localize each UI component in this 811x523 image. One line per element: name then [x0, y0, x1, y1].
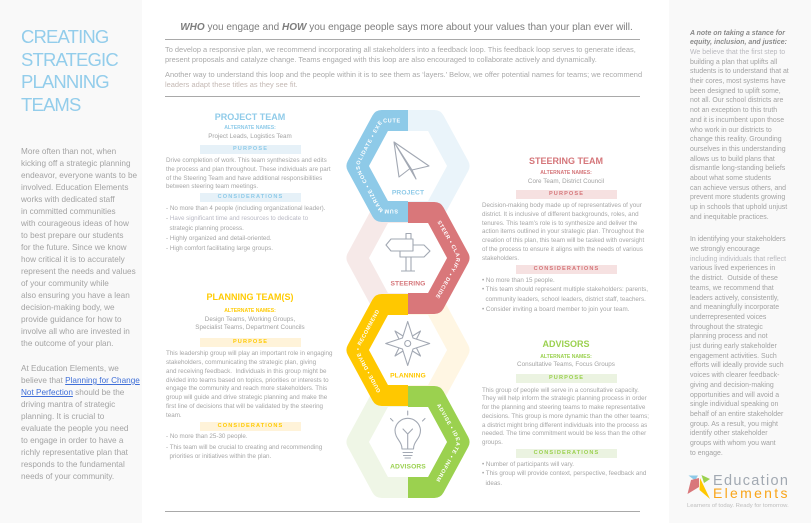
list: considerations [482, 460, 646, 486]
text block: left intro: how critical it is to accurately [21, 255, 125, 264]
text block: intro paragraph two [165, 70, 642, 89]
list: considerations: - No more than 25-30 people. [166, 433, 248, 440]
segment labels on path: ADVISE • IDEATE • INFORM [436, 404, 460, 482]
alternate names label: ALTERNATE NAMES: [224, 124, 276, 130]
text block: stakeholders note: voices with clearer feedback- [690, 372, 779, 379]
list: considerations: - No more than 4 people (including organizational leader). [166, 205, 325, 212]
text: purpose: This leadership group will play an important role in engaging [166, 350, 332, 357]
list: considerations: • No more than 15 people. [482, 276, 555, 284]
heading: steering team: STEERING TEAM [529, 156, 603, 166]
text block: left belief statement: At Education Elements, we [21, 364, 119, 373]
text block: stakeholders note: throughout the strategic [690, 324, 763, 331]
band: considerations: CONSIDERATIONS [534, 450, 599, 456]
panel: advisors [482, 339, 649, 486]
text block: equity note: can achieve versus others, and [690, 185, 786, 192]
text: purpose: for the planning and steering teams to make representative [482, 404, 645, 411]
text block: left belief statement: believe that Planning for Change [21, 376, 140, 385]
text block: stakeholders note: various lived experiences in [690, 265, 775, 272]
title: PLANNING [21, 71, 109, 92]
text block: equity note: dismantle long-standing beliefs [690, 165, 785, 172]
text block: left intro: the outcome of your plan. [21, 339, 113, 348]
list: considerations: - High comfort facilitating large groups. [166, 245, 273, 252]
text block: equity note: We believe that the first step to [690, 49, 785, 56]
text block: left intro: with courageous ideas of how [21, 219, 129, 228]
alternate names label: ALTERNATE NAMES: [224, 308, 276, 314]
text block: left belief statement: driving mantra of strategic [21, 400, 115, 409]
segment: advisors [408, 386, 470, 498]
band: purpose [200, 338, 301, 347]
text block: left belief statement: planning. It is crucial to [21, 412, 104, 421]
alternate names: Core Team, District Council [528, 178, 604, 185]
text block: equity note: not an exception to this truth [690, 107, 777, 114]
text block: intro paragraph one [165, 45, 636, 64]
text block: intro paragraph one: To develop a responsive plan, we recommend incorporating all stakeholders into a feedback loop. This feedback loop serves to generate ideas, [165, 45, 636, 54]
title: CREATING [21, 26, 108, 47]
labels: hexagon centres: PLANNING [390, 372, 426, 380]
text block: stakeholders note: including individuals that reflect [690, 256, 786, 263]
text: purpose [166, 157, 331, 190]
chart: hexagon feedback loop [346, 110, 470, 498]
text block: left intro: to best prepare our students [21, 231, 123, 240]
text block: equity note [690, 30, 789, 221]
text: purpose: tenures. This team’s role is to synthesize and deliver the [482, 220, 637, 226]
list: considerations: ideas. [485, 480, 502, 486]
text: purpose [482, 387, 649, 446]
title [21, 26, 118, 115]
text: purpose [166, 350, 332, 419]
text block: left intro: kicking off a strategic planning [21, 159, 131, 168]
band: considerations [200, 422, 301, 431]
text block: equity note: ourselves in this understanding [690, 146, 786, 153]
text block: stakeholders note: behalf of an entire stakeholder [690, 411, 783, 418]
text block: stakeholders note: identify other stakeholder [690, 430, 768, 437]
text block: stakeholders note: we strongly encourage [690, 246, 760, 253]
text block: left intro: involve all who are invested in [21, 327, 130, 336]
wordmark: Education: Education [713, 473, 789, 489]
list: considerations continued: priorities or initiatives within the plan. [169, 453, 271, 460]
band: purpose: PURPOSE [549, 191, 584, 197]
text block: left intro: More often than not, when [21, 147, 116, 156]
text: purpose: needed. The time commitment would be less than the other [482, 430, 646, 437]
text block: equity note: and inequitable practices. [690, 214, 769, 221]
band: considerations: CONSIDERATIONS [534, 266, 599, 272]
text block: stakeholders note: leaders actively, consistently, [690, 295, 779, 302]
logo: Education Elements [687, 473, 790, 509]
text block: equity note: up in schools that uphold unjust [690, 204, 787, 211]
segment: steering [408, 202, 470, 314]
text block: stakeholders note: engagement activities. Such [690, 353, 777, 360]
panel: planning teams [166, 292, 332, 460]
icon: light bulb [390, 411, 425, 458]
list: considerations continued: - This team will be crucial to creating and recommending [166, 444, 322, 451]
text: purpose: divided into teams based on topics, priorities or interests to [166, 377, 329, 384]
text block: left intro: endeavor, everyone wants to be [21, 171, 137, 180]
text block: left intro: of your community while [21, 279, 109, 288]
band: purpose: PURPOSE [233, 339, 268, 345]
band: considerations [200, 193, 301, 202]
band: considerations: CONSIDERATIONS [218, 194, 283, 200]
text block: left intro: involved. Education Elements [21, 183, 128, 192]
tagline: Learners of today. Ready for tomorrow. [687, 503, 789, 509]
text block: equity note: who work in our districts to [690, 127, 772, 134]
band: purpose [516, 190, 617, 199]
text block: stakeholders note: planning process and not [690, 333, 768, 340]
icon: paper plane [394, 142, 429, 179]
text: purpose: stakeholders. [482, 254, 519, 262]
alternate names: Specialist Teams, Department Councils [195, 324, 305, 331]
text block: stakeholders note: group. As a result, you might [690, 421, 778, 428]
icon: logo mark [688, 475, 710, 499]
alternate names: Project Leads, Logistics Team [208, 132, 292, 140]
text block: left belief statement: responds to the fundamental [21, 460, 125, 469]
band: considerations: CONSIDERATIONS [218, 423, 283, 429]
text block: left belief statement: Not Perfection should be the [21, 388, 124, 397]
segment labels on path: SUMMARIZE • CONSOLIDATE • EXECUTE [356, 118, 400, 214]
text: purpose: team. [166, 412, 182, 419]
text block: equity note: prevent more students growing [690, 194, 785, 201]
band: considerations [516, 265, 617, 274]
heading: planning teams: PLANNING TEAM(S) [206, 292, 294, 302]
band: purpose [200, 145, 301, 154]
text block: stakeholders note: underrepresented voices [690, 314, 766, 321]
band: purpose [516, 374, 617, 383]
panel: left sidebar background [0, 0, 142, 523]
labels: hexagon centres [390, 190, 426, 470]
title: STRATEGIC [21, 49, 118, 70]
text block: left intro: in committed communities [21, 207, 116, 216]
panel: steering team [482, 156, 648, 313]
segment labels on path: GUIDE • DRIVE • RECOMMEND [356, 310, 380, 392]
text block: left belief statement [21, 364, 140, 481]
text block: stakeholders note: efforts will ideally provide such [690, 362, 784, 369]
text: purpose: a district might bring different individuals into the process as [482, 422, 647, 429]
text block: stakeholders note: the district. Outside of these [690, 275, 778, 282]
list: considerations [166, 205, 325, 252]
text block: left intro: decision-making body, we [21, 303, 115, 312]
text block: intro paragraph two: Another way to understand this loop and the people within it is to see them as ‘layers.’ Below, we offer potential names for teams; we recommend [165, 70, 642, 79]
text: purpose: stakeholders, communicating the strategic plan, giving [166, 359, 316, 366]
text: purpose: of the process to ensure it aligns with the needs of various [482, 246, 643, 253]
list: considerations: • This team should represent multiple stakeholders: parents, [482, 286, 648, 293]
text block: stakeholders note: just during early stakeholder [690, 343, 777, 350]
text block: left intro: for the future. Since we know [21, 243, 127, 252]
alternate names: Design Teams, Working Groups, [205, 316, 295, 322]
list: considerations: - Highly organized and detail-oriented. [166, 235, 272, 242]
text block: stakeholders note: and meaningfully incorporate [690, 304, 779, 311]
text: purpose: action items outlined in your strategic plan. Throughout the [482, 228, 644, 235]
text: purpose: Drive completion of work. This team synthesizes and edits [166, 157, 327, 164]
text block: stakeholders note: single individual speaking on [690, 401, 778, 408]
list: considerations: strategic planning process. [169, 225, 244, 232]
text block: equity note: equity, inclusion, and justice: [690, 39, 787, 46]
text block: equity note: students is to understand that at [690, 68, 789, 75]
text block: left belief statement: evaluate the people you need [21, 424, 128, 433]
text: purpose: They will help inform the strategic planning process in order [482, 395, 647, 402]
text: purpose: Decision-making body made up of representatives of your [482, 202, 642, 209]
text block: left belief statement: richly representative plan that [21, 448, 128, 457]
segment: project [346, 110, 408, 222]
text block: stakeholders note: giving and decision-making [690, 382, 774, 389]
text block: stakeholders note: groups with whom you want [690, 440, 776, 447]
segment labels on path [356, 118, 460, 482]
list: considerations: • This group will provide context, perspective, feedback and [482, 470, 646, 477]
text block: equity note: building a plan that uplifts all [690, 59, 777, 66]
text block: left intro: also ensuring you have a lean [21, 291, 130, 300]
text block: equity note: about what some students [690, 175, 771, 182]
text: purpose: first line of decisions that will be validated by the steering [166, 403, 323, 410]
wordmark: Elements: Elements [713, 485, 790, 501]
text block: equity note: allows us to build plans that [690, 156, 775, 163]
heading: advisors: ADVISORS [542, 339, 590, 349]
text: purpose: creation of this plan, this team will be tasked with oversight [482, 237, 644, 244]
text block: left intro: works with dedicated staff [21, 195, 115, 204]
alternate names: Consultative Teams, Focus Groups [517, 361, 615, 368]
text block: equity note: not all. Our school districts are [690, 97, 783, 104]
alternate names [195, 316, 305, 331]
text: purpose: the process and plan throughout. These individuals are part [166, 166, 331, 173]
panel: right sidebar background [669, 0, 811, 523]
text block: equity note: their cores, most systems have [690, 78, 786, 85]
alternate names label: ALTERNATE NAMES: [540, 170, 592, 176]
text: purpose: engage the community and reach more stakeholders. This [166, 385, 327, 392]
band: purpose: PURPOSE [549, 375, 584, 381]
text: purpose: and receiving feedback. Individuals in this group might be [166, 368, 327, 375]
text block: left belief statement: needs of your community. [21, 472, 114, 481]
text: purpose: group will guide and drive strategic planning and make the [166, 394, 327, 401]
hexagon tints [357, 120, 459, 488]
text block: equity note: A note on taking a stance for [690, 30, 785, 36]
text block: left intro [21, 147, 137, 348]
text: purpose: groups. [482, 439, 503, 446]
labels: hexagon centres: PROJECT [392, 190, 425, 196]
text: purpose: This group of people will serve in a consultative capacity. [482, 387, 639, 394]
list: considerations continued [166, 444, 322, 460]
list: considerations: - Have significant time and resources to dedicate to [166, 215, 308, 222]
labels: hexagon centres: ADVISORS [390, 464, 426, 470]
list: considerations: • Consider inviting a board member to join your team. [482, 306, 629, 313]
alternate names label: ALTERNATE NAMES: [540, 354, 592, 360]
text block: left intro: represent the needs and values [21, 267, 136, 276]
text: purpose: decisions. This group is more dynamic than the other teams; [482, 413, 649, 420]
text block: stakeholders note: In identifying your stakeholders [690, 236, 786, 243]
text block: intro paragraph two: leaders adapt these titles as they see fit. [165, 80, 298, 89]
text block: stakeholders note: opportunities and will avoid a [690, 392, 779, 399]
text: purpose: between steering team meetings. [166, 183, 258, 190]
title: TEAMS [21, 94, 80, 115]
icon: signpost [386, 234, 430, 271]
segment: planning [346, 294, 408, 406]
text block: intro paragraph one: present proposals and catalyze change. Teams engaged with this loop are also encouraged to collaborate actively and dynamically. [165, 55, 597, 64]
heading: project team: PROJECT TEAM [215, 112, 285, 122]
segment labels on path: STEER • CLARIFY • DECIDE [436, 220, 460, 298]
panel: project team [166, 112, 331, 252]
text: purpose [482, 202, 644, 262]
list: considerations: • Number of participants will vary. [482, 460, 574, 468]
list: considerations [482, 276, 648, 313]
text block: stakeholders note [690, 236, 786, 457]
text block: stakeholders note: to engage. [690, 450, 723, 457]
text block: equity note: and it is incumbent upon those [690, 117, 784, 124]
text block: equity note: change this reality. Grounding [690, 136, 782, 143]
band: purpose: PURPOSE [233, 146, 268, 152]
icon: compass star [386, 322, 430, 366]
text block: left belief statement: to engage in order to have a [21, 436, 123, 445]
heading: WHO you engage and HOW you engage people says more about your values than your plan ever will. [180, 22, 633, 33]
list: considerations: community leaders, school leaders, district staff, teachers. [485, 296, 646, 303]
labels: hexagon centres: STEERING [390, 280, 426, 288]
text: purpose: district. It is inclusive of different backgrounds, roles, and [482, 211, 639, 218]
text block: equity note: been designed to uplift some, [690, 88, 781, 95]
text: purpose: of the Steering Team and have additional responsibilities [166, 175, 322, 182]
text block: stakeholders note: teams, we recommend that [690, 285, 774, 292]
band: considerations [516, 449, 617, 458]
text block: left intro: provide guidance for how to [21, 315, 122, 324]
